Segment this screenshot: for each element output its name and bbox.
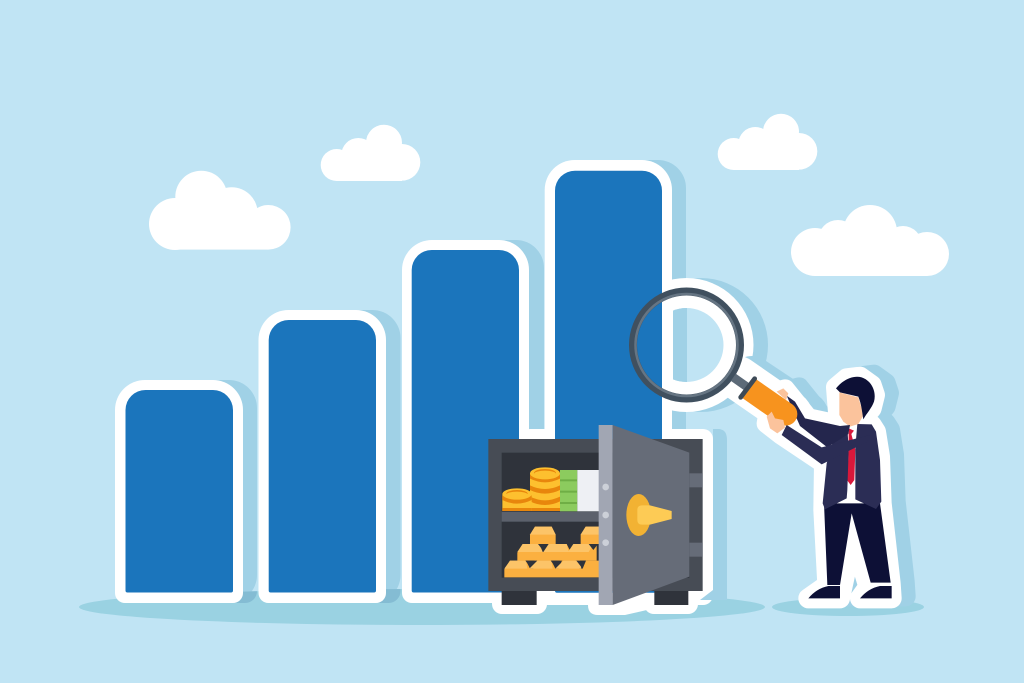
magnifying glass	[620, 278, 806, 414]
man silhouette shadow	[781, 375, 906, 596]
coins	[502, 467, 560, 511]
lens ring	[633, 292, 740, 398]
magnifier handle	[733, 377, 797, 426]
door frame	[599, 425, 613, 605]
shelf	[502, 512, 600, 522]
businessman	[733, 377, 892, 598]
front arm	[782, 425, 870, 464]
upper body	[733, 377, 881, 509]
cloud: top right	[718, 114, 817, 170]
tie	[847, 428, 855, 485]
legs and shoes	[808, 503, 892, 598]
magnifier shadow	[694, 278, 768, 412]
safe white outline	[492, 429, 713, 615]
shadow on ground	[235, 589, 400, 603]
cloud: top centre	[321, 125, 420, 181]
shirt	[846, 423, 858, 491]
bar 3	[402, 240, 529, 603]
bar 4	[545, 160, 672, 603]
cash	[560, 470, 599, 511]
bar shadows	[129, 160, 686, 603]
handle outline shadow	[752, 378, 806, 414]
back arm	[787, 396, 850, 447]
man white outline	[767, 377, 892, 598]
door handle	[626, 494, 672, 536]
safe shadow	[700, 429, 727, 600]
magnifier outline	[672, 278, 754, 412]
illustration: bar chart, safe and businessman	[79, 114, 949, 625]
safe	[488, 425, 703, 605]
handle outline	[738, 378, 790, 414]
cloud: right	[791, 205, 949, 276]
bar 2	[258, 310, 386, 603]
face	[839, 392, 863, 427]
jacket	[823, 424, 881, 509]
safe body	[488, 439, 703, 605]
ground shadows	[79, 589, 924, 625]
lens view	[673, 308, 724, 382]
gold bars	[504, 527, 599, 577]
bar chart	[115, 160, 672, 603]
door	[613, 425, 689, 605]
bar 1	[115, 380, 243, 603]
hair	[836, 377, 875, 419]
hands	[767, 388, 788, 433]
cloud: left	[149, 171, 291, 250]
